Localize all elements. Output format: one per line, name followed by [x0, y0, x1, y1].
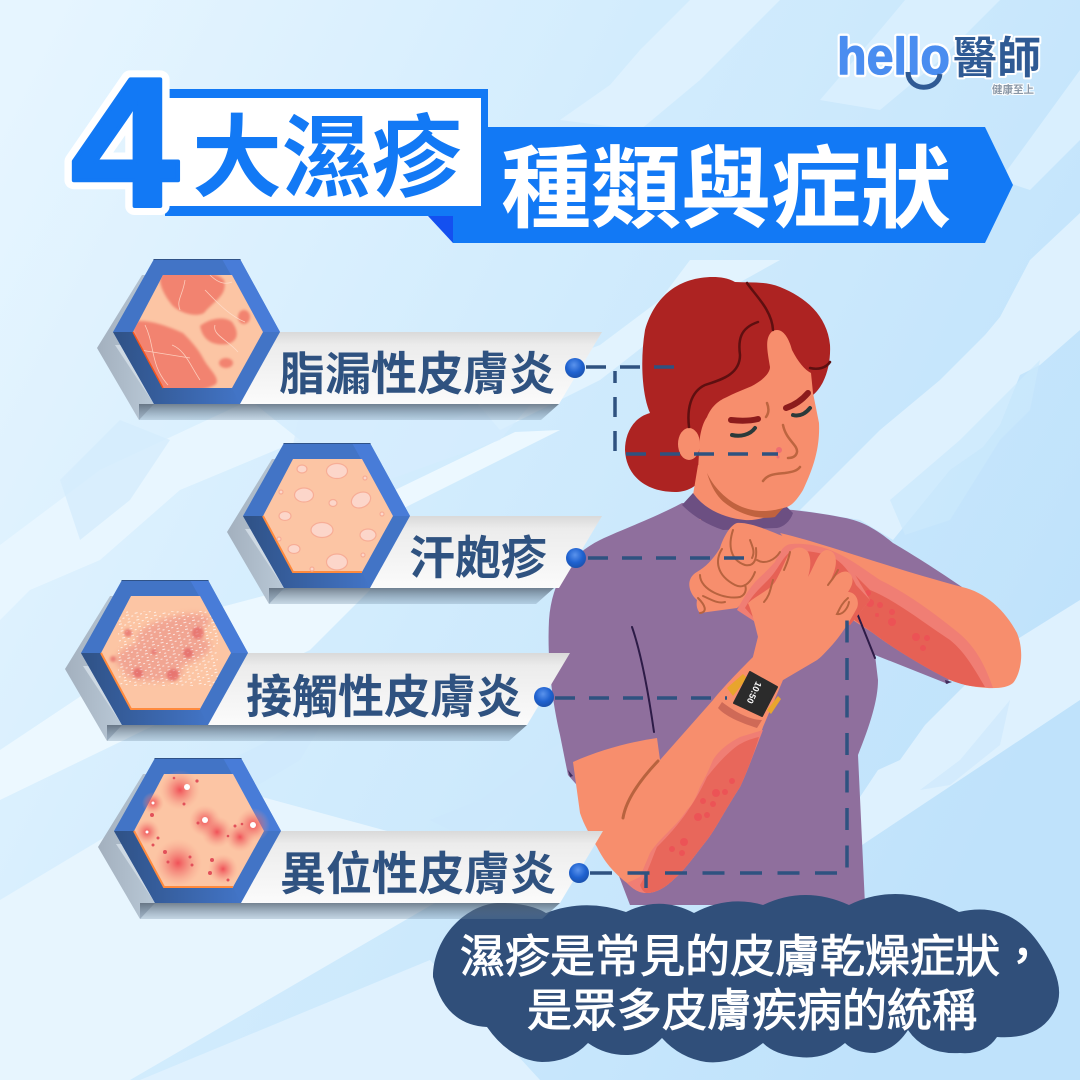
face — [695, 330, 819, 513]
title box: 4大濕疹 — [71, 39, 488, 245]
connector: 脂漏性皮膚炎 to face — [586, 367, 778, 454]
connector: 異位性皮膚炎 to arm — [590, 618, 847, 888]
wrist irritation — [718, 702, 762, 728]
texture: contact rash — [110, 608, 218, 686]
logo: hello 醫師: 醫師 — [953, 34, 1041, 83]
texture: atopic red spots — [134, 770, 270, 887]
chin shadow — [707, 473, 783, 518]
finger lines — [698, 530, 849, 614]
sleeve hems — [568, 680, 952, 777]
title banner: 種類與症狀 — [428, 127, 1013, 243]
texture: blisters — [277, 464, 384, 571]
lower fist — [689, 523, 800, 613]
logo: hello 醫師: hello — [837, 28, 950, 86]
gripping hand — [748, 548, 858, 680]
hair lines — [688, 283, 830, 427]
callout cloud — [433, 894, 1059, 1062]
connector: 汗皰疹 to hand — [588, 556, 755, 560]
rash on wrist — [737, 544, 870, 625]
logo: hello 醫師: hello — [837, 28, 950, 86]
watch — [727, 672, 781, 716]
collar — [682, 493, 793, 530]
watch: 10:50 — [745, 680, 763, 705]
brows and eyes — [731, 393, 810, 481]
callout cloud: 濕疹是常見的皮膚乾燥症狀， — [460, 931, 1045, 982]
texture: seborrheic skin — [130, 270, 250, 393]
figure: woman with eczema — [549, 277, 1021, 905]
sleeve lines — [632, 613, 875, 732]
right arm with rash — [780, 533, 1021, 688]
panel: 異位性皮膚炎 — [98, 758, 603, 919]
elbow crease — [623, 761, 658, 818]
ear — [678, 428, 700, 460]
panel: 異位性皮膚炎: 異位性皮膚炎 — [280, 848, 556, 900]
marker dots — [534, 358, 589, 883]
panel: 汗皰疹 — [227, 443, 602, 604]
panel: 汗皰疹: 汗皰疹 — [409, 532, 547, 584]
logo: hello 醫師: 健康至上 — [992, 83, 1034, 96]
logo: hello 醫師 — [837, 28, 1041, 96]
connector: 接觸性皮膚炎 to wrist — [555, 696, 727, 700]
hair — [625, 277, 830, 492]
title box: 4大濕疹: 大濕疹 — [192, 109, 462, 209]
panel: 接觸性皮膚炎 — [65, 580, 570, 741]
panel: 脂漏性皮膚炎: 脂漏性皮膚炎 — [279, 348, 555, 400]
neck — [693, 465, 787, 525]
title banner: 種類與症狀: 種類與症狀 — [501, 140, 951, 240]
torso: purple shirt — [549, 503, 962, 905]
panel: 脂漏性皮膚炎 — [97, 259, 602, 420]
nose rash — [774, 447, 782, 458]
left arm with rash — [573, 617, 848, 893]
title box: 4大濕疹: 4 — [71, 39, 179, 245]
callout cloud: 是眾多皮膚疾病的統稱 — [527, 985, 977, 1036]
panel: 接觸性皮膚炎: 接觸性皮膚炎 — [246, 671, 522, 723]
title box: 4大濕疹: 4 — [71, 39, 179, 245]
